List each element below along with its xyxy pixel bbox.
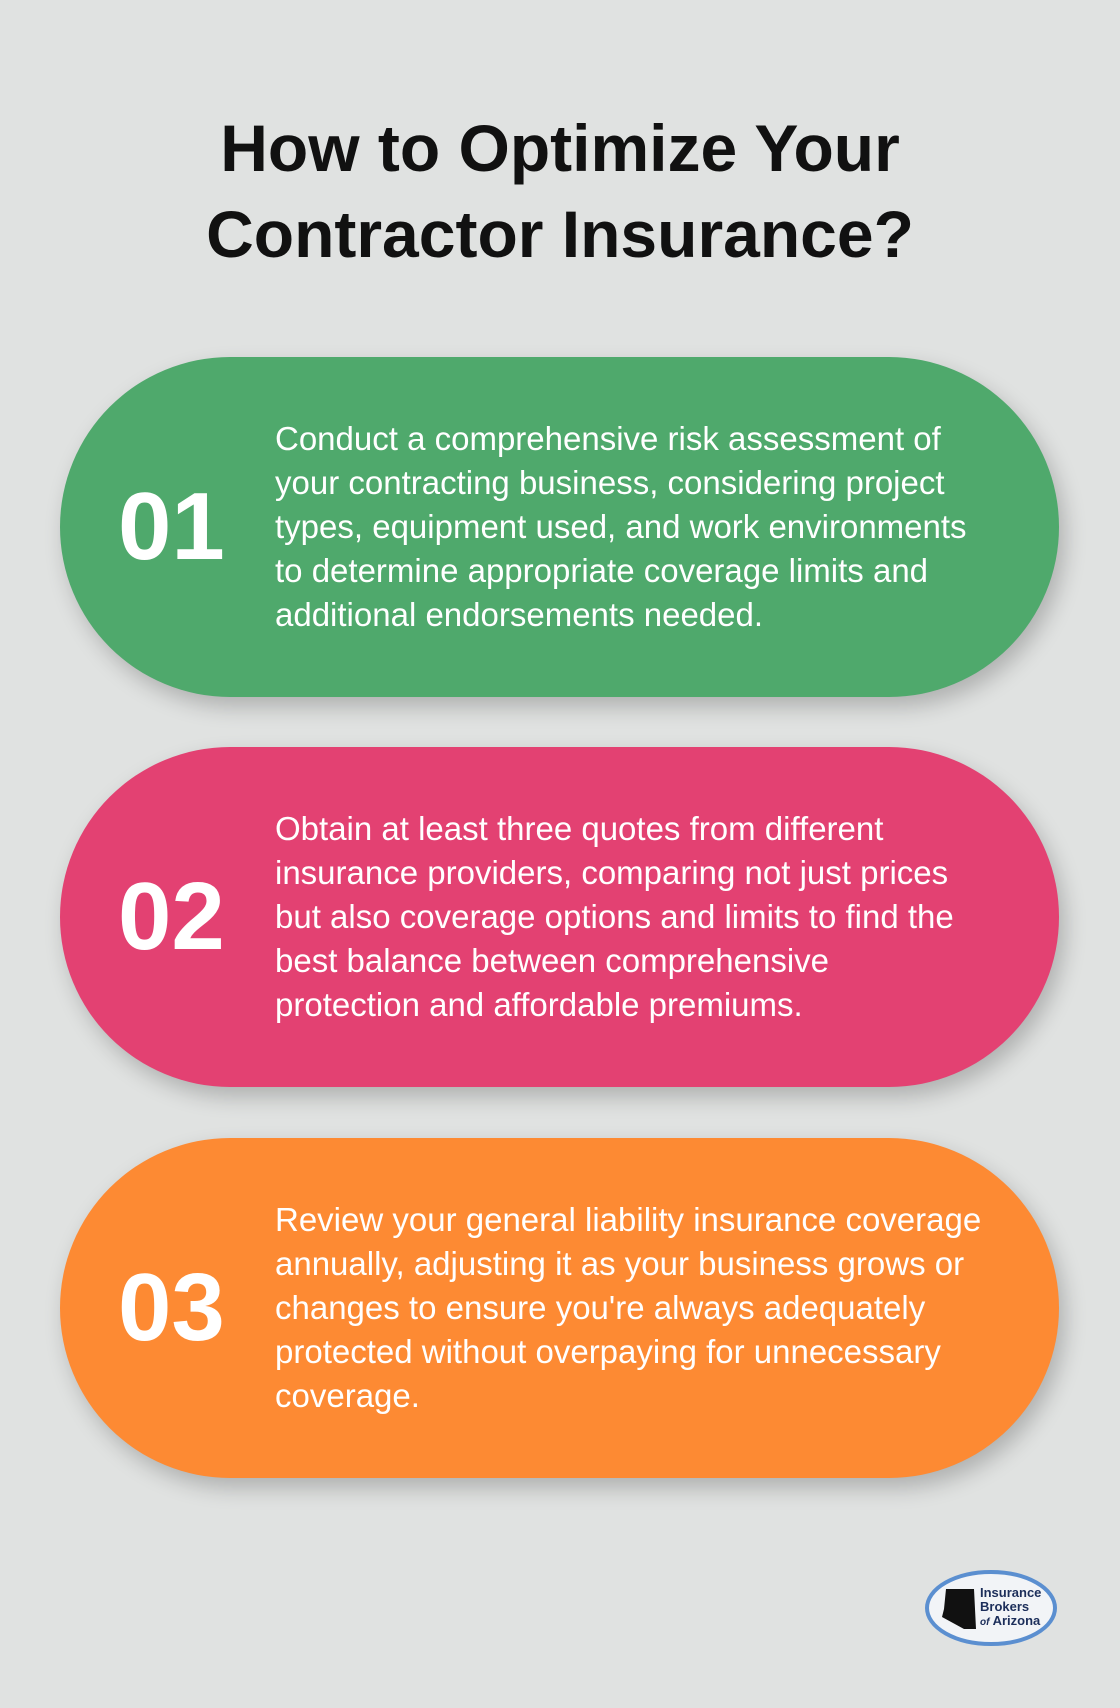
title bbox=[206, 111, 914, 271]
text: step 02: best balance between comprehensive bbox=[275, 942, 829, 979]
text: step 01 bbox=[275, 420, 967, 633]
text: step 02: protection and affordable premiums. bbox=[275, 986, 803, 1023]
text: step 01: additional endorsements needed. bbox=[275, 596, 763, 633]
text: step 03 bbox=[275, 1201, 981, 1414]
text: step 02: insurance providers, comparing not just prices bbox=[275, 854, 948, 891]
number 02: 02 bbox=[118, 863, 225, 970]
panel: step 03 bbox=[60, 1138, 1059, 1478]
logo: Brokers bbox=[980, 1599, 1029, 1614]
text: step 03: Review your general liability insurance coverage bbox=[275, 1201, 981, 1238]
text: step 02: but also coverage options and limits to find the bbox=[275, 898, 954, 935]
logo: Insurance bbox=[980, 1585, 1041, 1600]
logo: of Arizona bbox=[980, 1613, 1041, 1628]
panel: step 01 bbox=[60, 357, 1059, 697]
number 01: 01 bbox=[118, 473, 225, 580]
title: Contractor Insurance? bbox=[206, 197, 914, 271]
text: step 01: Conduct a comprehensive risk assessment of bbox=[275, 420, 941, 457]
text: step 03: changes to ensure you're always adequately bbox=[275, 1289, 925, 1326]
text: step 03: coverage. bbox=[275, 1377, 420, 1414]
text: step 01: types, equipment used, and work environments bbox=[275, 508, 967, 545]
title: How to Optimize Your bbox=[220, 111, 900, 185]
text: step 03: protected without overpaying for unnecessary bbox=[275, 1333, 941, 1370]
panel: step 02 bbox=[60, 747, 1059, 1087]
text: step 03: annually, adjusting it as your business grows or bbox=[275, 1245, 964, 1282]
number 03: 03 bbox=[118, 1254, 225, 1361]
text: step 02 bbox=[275, 810, 954, 1023]
text: step 01: to determine appropriate coverage limits and bbox=[275, 552, 928, 589]
text: step 02: Obtain at least three quotes from different bbox=[275, 810, 883, 847]
logo bbox=[925, 1570, 1057, 1646]
text: step 01: your contracting business, considering project bbox=[275, 464, 945, 501]
